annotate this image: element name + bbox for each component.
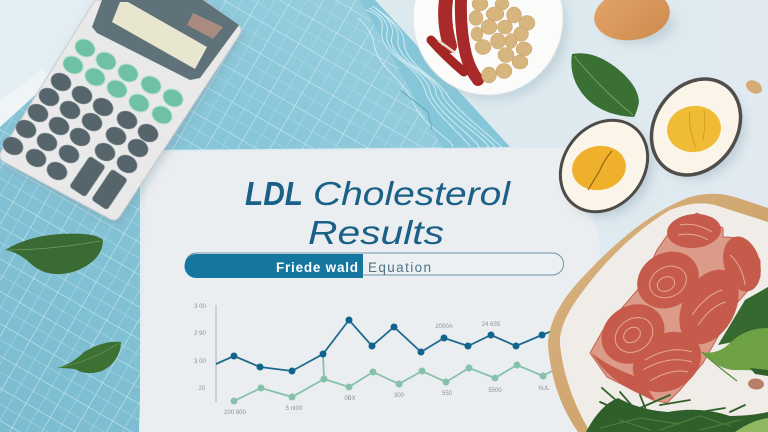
- series: dark blue: [216, 316, 552, 374]
- chart labels: 3 00: [194, 359, 206, 365]
- icon: small bean on plate: [748, 378, 764, 390]
- icon: brown egg: [591, 0, 674, 45]
- calculator display housing: [92, 0, 239, 80]
- icon: spinach leaf lower: [57, 342, 121, 373]
- chart labels: 2000A: [435, 324, 453, 330]
- chart labels: 2 90: [194, 331, 206, 337]
- title: Cholesterol: [313, 175, 512, 212]
- chart labels: 300: [394, 393, 405, 399]
- white plate: [560, 203, 768, 432]
- chart labels: 200 800: [224, 410, 246, 416]
- subtitle bar: Friedewald Equation: Equation: [368, 260, 431, 275]
- chart labels: [194, 304, 550, 416]
- title: Results: [308, 214, 444, 251]
- chart labels: 20: [199, 386, 206, 392]
- chart labels: 550: [442, 391, 453, 397]
- icon: calculator: [0, 0, 244, 226]
- icon: bowl with peppers and beans: [413, 0, 568, 100]
- beans: [469, 0, 535, 83]
- icon: small bean: [744, 78, 764, 96]
- series: light green: [230, 354, 552, 404]
- icon: salad greens: [702, 287, 768, 381]
- panel: paper report: [139, 148, 600, 432]
- solar cell: [187, 13, 223, 39]
- icon: meat steak: [590, 212, 767, 404]
- subtitle bar: Friedewald Equation: Friede wald: [276, 260, 358, 275]
- calculator screen: [112, 2, 207, 69]
- chart labels: 3 00: [194, 304, 206, 310]
- dark keys: [0, 70, 161, 210]
- icon: halved egg right: [633, 62, 763, 196]
- panel: blue cutting mat: [0, 0, 510, 432]
- icon: spinach leaf left: [5, 234, 103, 274]
- chart labels: 5500: [488, 388, 502, 394]
- chart labels: 5 nt00: [286, 406, 303, 412]
- white sheet under mat: [0, 70, 60, 135]
- chart labels: hUL: [538, 386, 550, 392]
- line chart: [194, 304, 552, 416]
- red chili peppers: [431, 0, 478, 80]
- subtitle bar: Friedewald Equation: [184, 253, 564, 278]
- icon: dill sprig: [586, 388, 768, 432]
- icon: spinach leaf top: [571, 53, 639, 117]
- panel: wooden board and plate: [548, 194, 768, 432]
- title: [245, 175, 512, 251]
- title: LDL: [245, 175, 303, 212]
- green keys: [60, 36, 186, 127]
- icon: halved egg left: [542, 103, 671, 234]
- chart labels: 24 635: [482, 322, 501, 328]
- chart labels: 0BX: [344, 396, 356, 402]
